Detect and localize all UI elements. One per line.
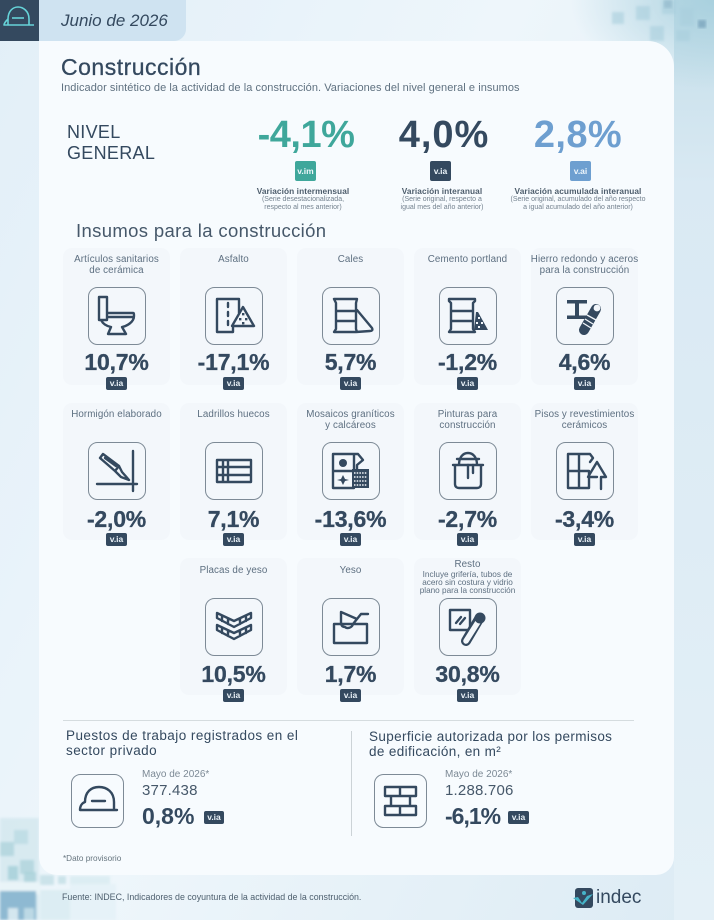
- icon: plasterboard stack: [205, 598, 263, 656]
- stat: variación interanual: [399, 114, 489, 211]
- amount: 1.288.706: [445, 782, 514, 799]
- card: resto: v.ia: [461, 690, 474, 700]
- card: hierro: Hierro redondo y aceros: [531, 254, 638, 265]
- card: hormigón elaborado: -2,0%: [87, 506, 146, 532]
- heading: [369, 729, 612, 759]
- card: placas de yeso: v.ia: [227, 690, 240, 700]
- description detail: [510, 196, 646, 211]
- card: hierro: [531, 248, 638, 385]
- icon tab: helmet: [0, 0, 39, 41]
- title: Construcción: [61, 54, 201, 80]
- description detail: (Serie original, acumulado del año respecto: [510, 196, 646, 203]
- card: mosaicos: Mosaicos graníticos: [306, 409, 395, 420]
- description detail: respecto al mes anterior): [264, 204, 342, 211]
- icon: paint can: [439, 442, 497, 500]
- note: resto detail: plano para la construcción: [420, 586, 515, 595]
- description heading: Variación acumulada interanual: [515, 186, 641, 196]
- card: hormigón elaborado: Hormigón elaborado: [71, 409, 162, 420]
- badge: [295, 161, 316, 181]
- note: resto detail: acero sin costura y vidrio: [422, 578, 513, 587]
- badge: v.ia: [207, 812, 221, 822]
- badge: v.ia: [512, 812, 525, 822]
- badge: v.im: [297, 166, 314, 176]
- card: placas de yeso: Placas de yeso: [200, 565, 267, 576]
- card: mosaicos: [297, 403, 404, 540]
- card: mosaicos: v.ia: [344, 534, 357, 544]
- icon: floor tiles: [556, 442, 614, 500]
- card: hierro: para la construcción: [540, 264, 629, 276]
- card: cales: v.ia: [344, 378, 357, 388]
- icon: bag and cement pile: [439, 287, 497, 345]
- date tab: Junio de 2026: [61, 11, 168, 30]
- card: artículos sanitarios: v.ia: [110, 378, 123, 388]
- description detail: igual mes del año anterior): [401, 204, 483, 211]
- panel: superficie autorizada: [369, 729, 612, 829]
- card: resto: [414, 558, 521, 695]
- icon: brick wall: [374, 774, 427, 828]
- card: artículos sanitarios: 10,7%: [84, 349, 149, 375]
- description heading: Variación intermensual: [257, 186, 349, 196]
- card: mosaicos: y calcáreos: [325, 420, 376, 430]
- variation: 0,8%: [142, 803, 194, 829]
- card: cales: 5,7%: [325, 349, 376, 375]
- card: pinturas: Pinturas para: [438, 409, 497, 420]
- badge: [204, 811, 224, 824]
- icon: logo mark: [573, 888, 593, 908]
- heading: nivel general: NIVEL: [67, 122, 121, 142]
- wordmark: indec: [596, 887, 641, 908]
- stat: variación acumulada: [510, 114, 646, 211]
- card: ladrillos huecos: 7,1%: [208, 506, 259, 532]
- date: Mayo de 2026*: [445, 769, 512, 780]
- icon: glass and tube: [439, 598, 497, 656]
- card: resto: Resto: [454, 559, 481, 570]
- card: pinturas: -2,7%: [438, 506, 497, 532]
- card: pisos: cerámicos: [562, 420, 607, 430]
- heading: [66, 728, 298, 758]
- card: asfalto: [180, 248, 287, 385]
- icon: plaster tray: [322, 598, 380, 656]
- card: hormigón elaborado: v.ia: [110, 534, 123, 544]
- heading: de edificación, en m²: [369, 744, 501, 759]
- panel: puestos de trabajo: [66, 728, 298, 829]
- value: -4,1%: [258, 114, 354, 156]
- card: ladrillos huecos: v.ia: [227, 534, 240, 544]
- card: cales: Cales: [338, 254, 363, 265]
- heading: nivel general: [67, 122, 155, 163]
- card: hormigón elaborado: [63, 403, 170, 540]
- card: yeso: v.ia: [344, 690, 357, 700]
- card: cemento portland: [414, 248, 521, 385]
- card: pinturas: construcción: [439, 420, 496, 430]
- heading: nivel general: GENERAL: [67, 143, 155, 163]
- source: Fuente: INDEC, Indicadores de coyuntura de la actividad de la construcción.: [62, 892, 361, 902]
- icon: toilet: [88, 287, 146, 345]
- card: hierro: v.ia: [578, 378, 591, 388]
- card: yeso: 1,7%: [325, 661, 376, 687]
- card: artículos sanitarios: Artículos sanitarios: [74, 254, 159, 265]
- icon: trowel: [88, 442, 146, 500]
- stat: variación intermensual: [256, 114, 354, 211]
- card: asfalto: -17,1%: [198, 349, 269, 375]
- card: cemento portland: -1,2%: [438, 349, 497, 375]
- card: ladrillos huecos: [180, 403, 287, 540]
- value: 2,8%: [534, 114, 622, 156]
- card: hierro: 4,6%: [559, 349, 610, 375]
- badge: [430, 161, 451, 181]
- heading: Superficie autorizada por los permisos: [369, 729, 612, 744]
- icon: iron beam and rod: [556, 287, 614, 345]
- card: ladrillos huecos: Ladrillos huecos: [197, 409, 270, 420]
- icon: road and gravel: [205, 287, 263, 345]
- logo: indec: [573, 887, 641, 908]
- card: pisos: [531, 403, 638, 540]
- card: resto: 30,8%: [435, 661, 500, 687]
- divider: [63, 720, 634, 721]
- value: 4,0%: [399, 114, 489, 156]
- card: asfalto: v.ia: [227, 378, 240, 388]
- icon: helmet: [71, 774, 124, 828]
- heading: Puestos de trabajo registrados en el: [66, 728, 298, 743]
- card: pisos: v.ia: [578, 534, 591, 544]
- card: cales: [297, 248, 404, 385]
- amount: 377.438: [142, 782, 198, 799]
- description detail: (Serie original, respecto a: [402, 196, 482, 203]
- card: pisos: -3,4%: [555, 506, 614, 532]
- card: placas de yeso: [180, 558, 287, 695]
- description heading: Variación interanual: [402, 186, 482, 196]
- subtitle: Indicador sintético de la actividad de la construcción. Variaciones del nivel general e insumos: [61, 82, 520, 94]
- badge: [570, 161, 591, 181]
- description detail: a igual acumulado del año anterior): [523, 204, 633, 211]
- badge: v.ia: [434, 166, 447, 176]
- card: artículos sanitarios: de cerámica: [89, 264, 144, 276]
- note: resto detail: [420, 570, 515, 595]
- card: asfalto: Asfalto: [218, 254, 249, 265]
- heading: insumos: Insumos para la construcción: [76, 220, 326, 241]
- card: yeso: [297, 558, 404, 695]
- footnote: *Dato provisorio: [63, 854, 121, 863]
- card: pisos: Pisos y revestimientos: [535, 409, 634, 420]
- card: mosaicos: -13,6%: [315, 506, 386, 532]
- card: pinturas: [414, 403, 521, 540]
- card: cemento portland: v.ia: [461, 378, 474, 388]
- date tab: [39, 0, 186, 41]
- description detail: [262, 196, 344, 211]
- badge: [508, 811, 529, 824]
- badge: v.ai: [574, 166, 587, 176]
- card: artículos sanitarios: [63, 248, 170, 385]
- heading: sector privado: [66, 743, 157, 758]
- card: cemento portland: Cemento portland: [428, 254, 507, 265]
- icon: barrel and sack: [322, 287, 380, 345]
- description detail: [400, 196, 483, 211]
- variation: -6,1%: [445, 803, 500, 829]
- icon: mosaic tiles: [322, 442, 380, 500]
- card: pinturas: v.ia: [461, 534, 474, 544]
- card: yeso: Yeso: [340, 565, 361, 576]
- card: placas de yeso: 10,5%: [201, 661, 266, 687]
- description detail: (Serie desestacionalizada,: [262, 196, 344, 203]
- date: Mayo de 2026*: [142, 769, 209, 780]
- note: resto detail: Incluye grifería, tubos de: [423, 570, 512, 579]
- icon: hollow brick: [205, 442, 263, 500]
